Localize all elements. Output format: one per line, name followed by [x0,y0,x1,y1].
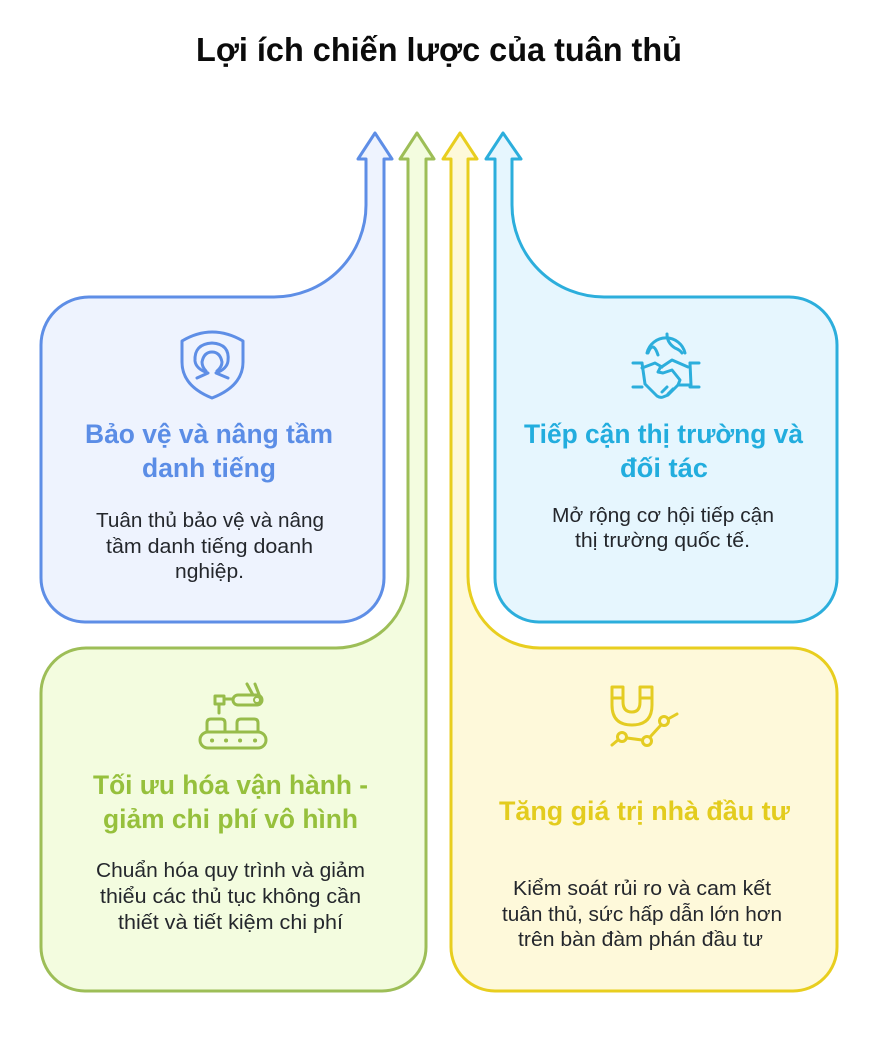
text block: tầm danh tiếng doanh [106,535,313,558]
text block [502,877,782,951]
text block: thị trường quốc tế. [575,529,750,552]
heading: Tiếp cận thị trường và [524,419,803,449]
panel: market access [486,133,837,622]
text block: nghiệp. [175,560,244,583]
text block: thiểu các thủ tục không cần [100,885,361,908]
heading [524,419,803,483]
text block [96,509,324,583]
heading [93,770,368,834]
icon: shield with person [182,332,243,398]
icon: globe and handshake [633,334,699,397]
panel: reputation [41,133,392,622]
heading: Bảo vệ và nâng tầm [85,419,333,449]
heading: giảm chi phí vô hình [103,804,358,834]
text block: thiết và tiết kiệm chi phí [118,911,343,934]
arrow shape: yellow [443,133,837,991]
text block: Kiểm soát rủi ro và cam kết [513,877,771,900]
heading: đối tác [620,453,708,483]
panel: operations [41,133,434,991]
text block [552,504,774,552]
heading: Tăng giá trị nhà đầu tư [499,796,791,826]
arrow shape: cyan [486,133,837,622]
text block: Mở rộng cơ hội tiếp cận [552,504,774,527]
arrow shape: green [41,133,434,991]
text block [96,859,365,934]
text block: Tuân thủ bảo vệ và nâng [96,509,324,532]
text block: Chuẩn hóa quy trình và giảm [96,859,365,882]
title: Lợi ích chiến lược của tuân thủ [196,31,682,68]
icon: robot arm and conveyor [200,684,266,748]
icon: magnet and growth line [612,687,677,746]
heading: danh tiếng [142,453,276,483]
text block: trên bàn đàm phán đầu tư [518,928,763,951]
heading: Tối ưu hóa vận hành - [93,770,368,800]
arrow shape: blue [41,133,392,622]
text block: tuân thủ, sức hấp dẫn lớn hơn [502,903,782,926]
heading [85,419,333,483]
panel: investor value [443,133,837,991]
